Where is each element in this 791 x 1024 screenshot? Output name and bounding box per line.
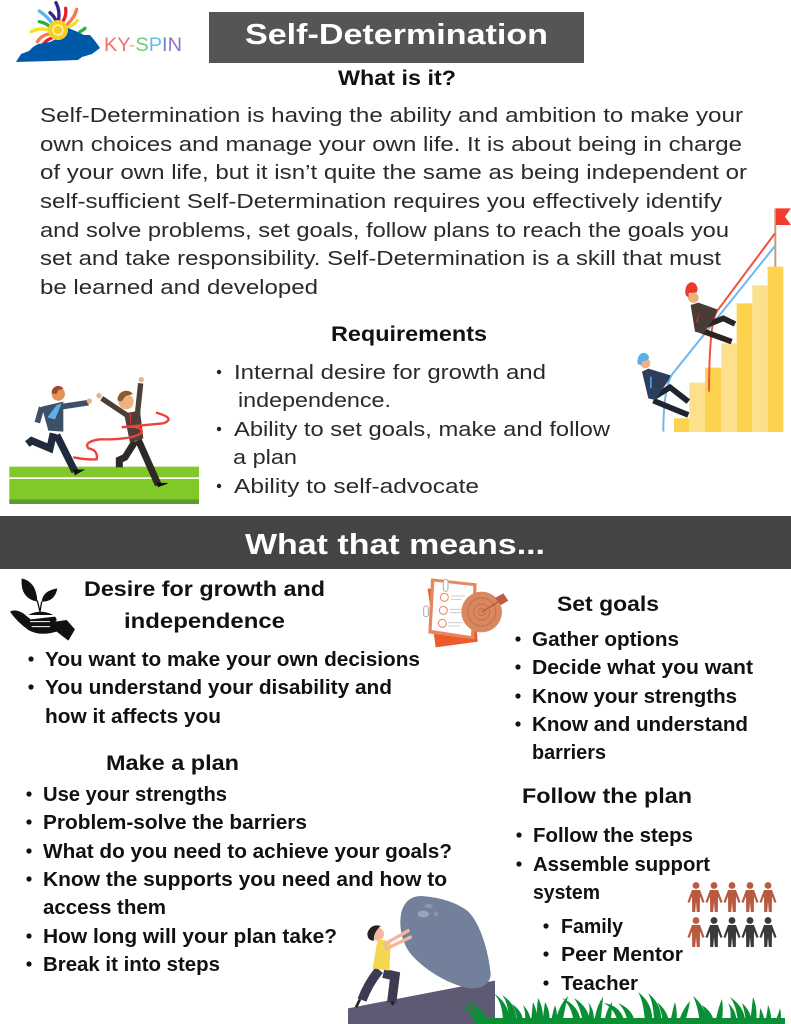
- text block: definition: own choices and manage your own life. It is about being in charge: [40, 134, 742, 156]
- list: follow the plan: Family: [561, 916, 624, 938]
- heading: desire for growth: independence: [124, 609, 285, 633]
- logo: KY-SPIN: [16, 3, 182, 62]
- list: desire for growth: You want to make your own decisions: [45, 649, 420, 671]
- list: make a plan: Break it into steps: [43, 954, 220, 976]
- heading: Requirements: Requirements: [331, 322, 487, 346]
- list: follow the plan: system: [533, 882, 600, 904]
- icon: climbers on a bar chart with flag: [637, 208, 791, 432]
- list: make a plan: access them: [43, 897, 166, 919]
- text block: definition: of your own life, but it isn’t quite the same as being independent or: [40, 162, 747, 184]
- heading: desire for growth: Desire for growth and: [84, 577, 325, 601]
- list: desire for growth: You understand your disability and: [45, 677, 392, 699]
- list: set goals: Decide what you want: [532, 657, 753, 679]
- heading: What is it?: What is it?: [338, 66, 456, 90]
- list: make a plan: [26, 784, 452, 976]
- list: set goals: Know and understand: [532, 714, 748, 736]
- text block: definition: Self-Determination is having the ability and ambition to make your: [40, 105, 743, 127]
- heading: desire for growth: [84, 577, 325, 633]
- list: requirements: a plan: [233, 447, 297, 469]
- list: requirements: independence.: [238, 390, 391, 412]
- list: requirements: Ability to self-advocate: [234, 476, 479, 498]
- list: set goals: [515, 629, 753, 764]
- section banner: What that means: What that means...: [245, 529, 545, 561]
- list: make a plan: Problem-solve the barriers: [43, 812, 307, 834]
- text block: definition: and solve problems, set goals, follow plans to reach the goals you: [40, 220, 729, 242]
- section banner: What that means: [0, 516, 791, 569]
- logo: KY-SPIN: KY-SPIN: [104, 35, 182, 56]
- text block: definition: set and take responsibility. Self-Determination is a skill that must: [40, 248, 722, 270]
- list: make a plan: What do you need to achieve your goals?: [43, 841, 452, 863]
- heading: Follow the plan: Follow the plan: [522, 784, 692, 808]
- heading: Make a plan: Make a plan: [106, 751, 239, 775]
- list: follow the plan: Assemble support: [533, 854, 710, 876]
- icon: support group of people: [688, 882, 776, 947]
- list: set goals: Know your strengths: [532, 686, 737, 708]
- icon: person pushing boulder up a slope: [348, 896, 495, 1024]
- icon: runners crossing finish line: [9, 377, 199, 504]
- list: make a plan: Use your strengths: [43, 784, 227, 806]
- list: set goals: Gather options: [532, 629, 679, 651]
- list: requirements: Internal desire for growth and: [234, 362, 546, 384]
- list: desire for growth: how it affects you: [45, 706, 221, 728]
- list: make a plan: Know the supports you need and how to: [43, 869, 447, 891]
- icon: hand holding plant: [10, 578, 75, 641]
- text block: definition: be learned and developed: [40, 277, 318, 299]
- list: requirements: Ability to set goals, make and follow: [234, 419, 611, 441]
- heading: Set goals: Set goals: [557, 592, 659, 616]
- list: follow the plan: Peer Mentor: [561, 944, 683, 966]
- list: make a plan: How long will your plan take?: [43, 926, 337, 948]
- list: follow the plan: Teacher: [561, 973, 638, 995]
- text block: definition: self-sufficient Self-Determination requires you effectively identify: [40, 191, 722, 213]
- text block: definition: [40, 105, 747, 299]
- list: follow the plan: [516, 825, 710, 995]
- decoration: grass: [460, 992, 785, 1024]
- title banner: [209, 12, 584, 63]
- list: requirements: [217, 362, 611, 498]
- title banner: Self-Determination: [245, 19, 548, 51]
- icon: checklist and target: [424, 578, 508, 647]
- list: follow the plan: Follow the steps: [533, 825, 693, 847]
- list: desire for growth: [28, 649, 420, 728]
- list: set goals: barriers: [532, 742, 606, 764]
